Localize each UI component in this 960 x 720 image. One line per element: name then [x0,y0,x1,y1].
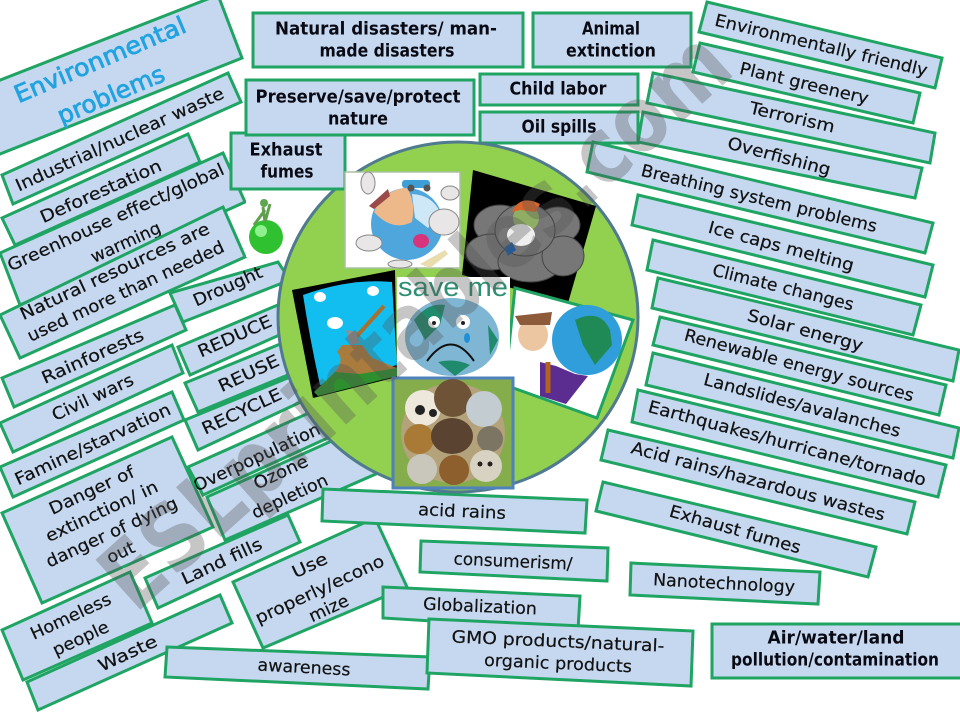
box: Air/water/land pollution [712,624,960,678]
box: REUSE [185,340,300,412]
box: Overfishing: Overfishing [725,134,833,180]
picture: save me sad earth: save me [398,272,508,302]
picture: save me sad earth [397,272,510,377]
box: Natural resources: Natural resources are [17,219,213,325]
box: Exhaust fumes top: Exhaust [250,140,323,160]
box: Child labor [480,74,638,105]
box: Oil spills [480,112,638,143]
box: Terrorism [647,73,935,163]
box: Danger of extinction: out [104,538,139,568]
box: Danger of extinction: danger of dying [43,494,181,572]
box: Earthquakes/hurricane/tornado: Earthquakes/hurricane/tornado [646,397,928,491]
title: Environmental problems: problems [53,60,169,130]
central green circle [278,142,638,492]
box: Air/water/land pollution: Air/water/land [768,628,904,648]
box: Solar energy: Solar energy [745,306,865,356]
box: consumerism [420,541,608,581]
box: acid rains [322,489,587,533]
box: awareness: awareness [257,656,351,680]
picture: axe in tree stump [292,270,397,398]
box: RECYCLE: RECYCLE [199,385,285,439]
picture: man carrying earth [505,288,633,418]
box: REDUCE [178,302,295,375]
box: Climate changes: Climate changes [710,261,856,315]
box: Natural disasters: made disasters [320,40,454,62]
box: Rainforests [2,305,186,407]
box: Natural resources [0,207,245,358]
box: Overfishing [638,112,922,198]
box: Animal extinction: Animal [582,18,640,40]
box: Famine/starvation: Famine/starvation [12,400,174,490]
box: Industrial/nuclear waste [2,73,241,204]
box: Civil wars [0,345,183,452]
box: GMO products [427,619,693,686]
box: Danger of extinction: Danger of [46,462,139,520]
box: Breathing system problems: Breathing system problems [639,161,879,237]
box: Exhaust fumes top: fumes [260,162,314,182]
box: Industrial/nuclear waste: Industrial/nuclear waste [13,84,227,196]
box: REUSE: REUSE [215,351,283,397]
box: Overpopulation: Overpopulation [190,420,324,496]
box: Rainforests: Rainforests [39,325,147,389]
box: REDUCE: REDUCE [195,312,275,362]
box: consumerism: consumerism/ [453,549,573,575]
box: RECYCLE [185,375,305,450]
box: Greenhouse effect/global warming [0,153,245,305]
box: Waste: Waste [95,632,161,676]
box: Globalization: Globalization [423,595,537,619]
box: Preserve/save/protect nature [246,80,474,135]
box: Plant greenery [693,43,920,123]
box: Danger of extinction [2,437,213,603]
box: Homeless people [2,572,152,680]
box: Exhaust fumes right: Exhaust fumes [667,502,803,558]
title: Environmental problems [0,0,242,158]
picture: polluted coughing earth [345,172,460,268]
box: Ozone depletion [207,435,385,540]
box: Environmentally friendly: Environmentally friendly [713,11,929,81]
box: GMO products: organic products [484,651,633,677]
box: Exhaust fumes right [596,482,876,577]
box: Natural disasters [253,13,523,67]
box: Acid rains/hazardous wastes [601,430,915,534]
box: Breathing system problems [587,142,933,253]
box: Preserve/save/protect nature: nature [328,108,388,130]
box: Solar energy [652,278,959,381]
box: Deforestation [2,134,200,245]
box: Natural resources: used more than needed [24,238,228,346]
box: Danger of extinction: extinction/ in [42,477,162,547]
icon: small green globe with figure [246,195,284,257]
box: Famine/starvation [0,392,184,497]
box: Terrorism: Terrorism [746,98,837,138]
box: Nanotechnology [630,563,820,604]
title: Environmental problems: Environmental [10,11,190,109]
box: Acid rains/hazardous wastes: Acid rains/hazardous wastes [629,438,887,526]
box: Waste [27,595,232,710]
box: Climate changes [647,240,921,335]
box: Deforestation: Deforestation [37,156,165,228]
box: Land fills [145,515,300,608]
picture: boy in smoke [462,170,596,303]
box: Oil spills: Oil spills [522,116,596,138]
box: Homeless people: Homeless [27,589,115,644]
box: Animal extinction [533,13,691,67]
box: Environmentally friendly [699,2,942,88]
box: Ozone depletion: Ozone [250,452,312,494]
box: Earthquakes/hurricane/tornado [632,390,946,497]
box: Land fills: Land fills [178,534,266,589]
box: Child labor: Child labor [510,78,607,100]
box: Greenhouse effect/global warming: warming [88,218,164,268]
box: Civil wars: Civil wars [49,370,137,426]
box: Use properly/economize: mize [306,591,352,627]
box: Animal extinction: extinction [566,40,656,62]
box: Exhaust fumes top [231,133,345,189]
box: Renewable energy sources [653,317,946,415]
box: Natural disasters: Natural disasters/ man- [275,18,497,40]
box: awareness [165,647,430,689]
box: Globalization [383,587,580,630]
box: Ice caps melting: Ice caps melting [706,218,856,276]
box: Use properly/economize: properly/econo [252,551,388,629]
box: GMO products: GMO products/natural- [451,627,665,657]
box: Greenhouse effect/global warming: Greenhouse effect/global [4,160,228,276]
box: Drought [170,262,290,322]
box: Landslides/avalanches [646,353,959,458]
picture: endangered animals collage [393,378,513,488]
box: acid rains: acid rains [418,500,507,524]
box: Renewable energy sources: Renewable energy sources [682,326,916,406]
box: Homeless people: people [50,617,112,661]
box: Preserve/save/protect nature: Preserve/save/protect [256,86,461,108]
box: Drought: Drought [190,263,266,311]
box: Ice caps melting [632,195,933,297]
box: Nanotechnology: Nanotechnology [653,570,795,598]
box: Plant greenery: Plant greenery [737,59,871,109]
box: Use properly/economize [233,518,407,648]
box: Landslides/avalanches: Landslides/avalanches [701,370,903,442]
box: Use properly/economize: Use [289,549,331,583]
box: Ozone depletion: depletion [249,471,331,523]
